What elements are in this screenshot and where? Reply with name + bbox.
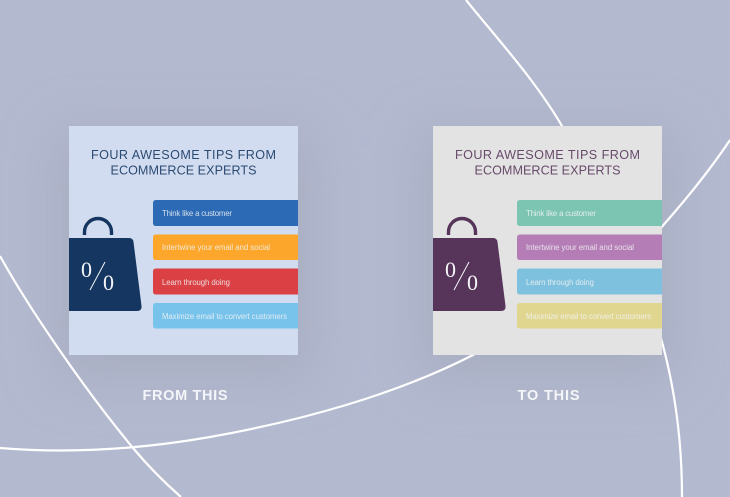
tip 4: Maximize email to convert customers: [526, 312, 651, 321]
tip 2: [153, 234, 298, 260]
heading: [455, 148, 640, 178]
tip 1: Think like a customer: [162, 209, 232, 218]
tip 1: [153, 200, 298, 226]
heading: FOUR AWESOME TIPS FROM: [91, 148, 276, 162]
heading: FOUR AWESOME TIPS FROM: [455, 148, 640, 162]
heading: [91, 148, 276, 178]
tip list: [153, 200, 298, 328]
caption: to this: TO THIS: [518, 388, 580, 404]
tip 2: Intertwine your email and social: [526, 243, 634, 252]
card shadows: [55, 130, 676, 380]
panel: from this: [69, 126, 298, 355]
tip 4: [153, 303, 298, 328]
icon: shopping bag: 0: [445, 257, 456, 282]
tip 2: [517, 234, 662, 260]
panel: to this: [433, 126, 662, 355]
tip 3: Learn through doing: [526, 278, 594, 287]
heading: ECOMMERCE EXPERTS: [110, 164, 256, 178]
tip 1: [517, 200, 662, 226]
tip 3: Learn through doing: [162, 278, 230, 287]
tip 4: [517, 303, 662, 328]
icon: shopping bag: [69, 218, 142, 311]
icon: shopping bag: 0: [467, 270, 478, 295]
icon: shopping bag: 0: [103, 270, 114, 295]
tip list: [517, 200, 662, 328]
card background: [69, 126, 298, 355]
icon: shopping bag: 0: [81, 257, 92, 282]
tip 3: [517, 268, 662, 294]
tip 4: Maximize email to convert customers: [162, 312, 287, 321]
tip 3: [153, 268, 298, 294]
tip 1: Think like a customer: [526, 209, 596, 218]
icon: shopping bag: [433, 218, 506, 311]
card background: [433, 126, 662, 355]
caption: from this: FROM THIS: [142, 388, 228, 404]
tip 2: Intertwine your email and social: [162, 243, 270, 252]
heading: ECOMMERCE EXPERTS: [474, 164, 620, 178]
